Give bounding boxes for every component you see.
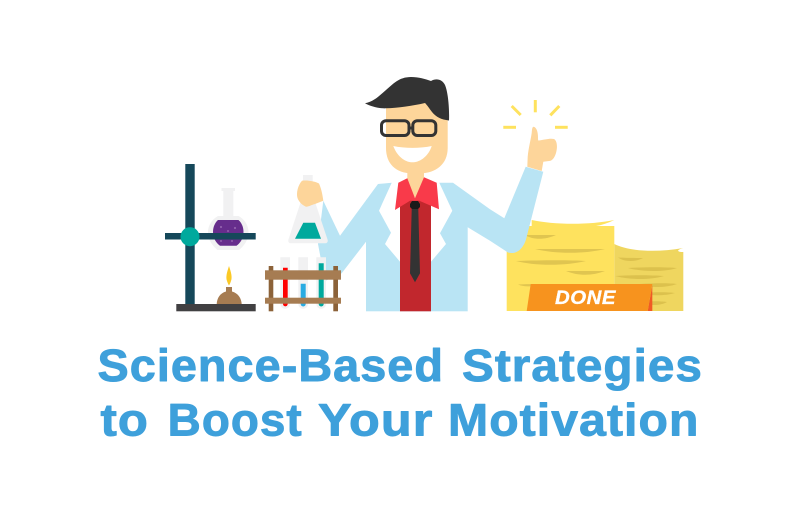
icon: stand base: [176, 304, 256, 311]
title: Strategies: [462, 340, 703, 391]
icon: blue liquid: [301, 284, 306, 306]
icon: coat body: [366, 200, 468, 311]
icon: tie knot: [410, 201, 420, 209]
title: Your: [318, 395, 434, 446]
icon: smile: [393, 146, 432, 162]
title: Motivation: [448, 395, 700, 446]
icon: sparkle rays: [503, 100, 568, 127]
icon: stand clamp: [180, 227, 200, 246]
icon: hair: [365, 77, 449, 120]
icon: teal liquid: [319, 263, 324, 306]
label: done banner: [527, 284, 652, 311]
icon: right arm sleeve: [439, 167, 543, 253]
icon: stand pole: [185, 164, 195, 304]
icon: rack bars: [265, 270, 341, 304]
icon: large paper stack: [507, 220, 614, 311]
icon: thumbs-up hand: [527, 127, 557, 171]
icon: small paper stack: [614, 244, 683, 311]
icon: tie: [410, 206, 420, 282]
label: done banner: DONE: [555, 287, 617, 309]
icon: collar: [395, 177, 439, 210]
icon: left arm sleeve: [318, 183, 400, 281]
test tube rack: [265, 257, 341, 311]
lab stand with flask: [165, 164, 256, 311]
scientist character: [288, 77, 557, 311]
title: Boost: [168, 395, 303, 446]
title: Science-Based: [98, 340, 444, 391]
title: [98, 340, 703, 446]
icon: rack legs: [269, 266, 338, 311]
icon: round flask: [208, 188, 248, 250]
paper stacks: [507, 220, 683, 311]
icon: head: [386, 100, 448, 173]
icon: neck: [407, 168, 424, 198]
icon: burner: [217, 287, 242, 304]
icon: shirt front: [379, 183, 452, 262]
icon: red liquid: [283, 268, 288, 306]
icon: handheld flask: [288, 175, 328, 243]
icon: stand crossbar: [165, 233, 256, 240]
icon: burner flame: [226, 266, 232, 286]
icon: left hand: [297, 181, 323, 207]
title: to: [100, 395, 149, 446]
icon: glasses: [382, 121, 436, 136]
icon: red shirt panel: [400, 200, 431, 311]
icon: test tube glass: [280, 257, 326, 309]
